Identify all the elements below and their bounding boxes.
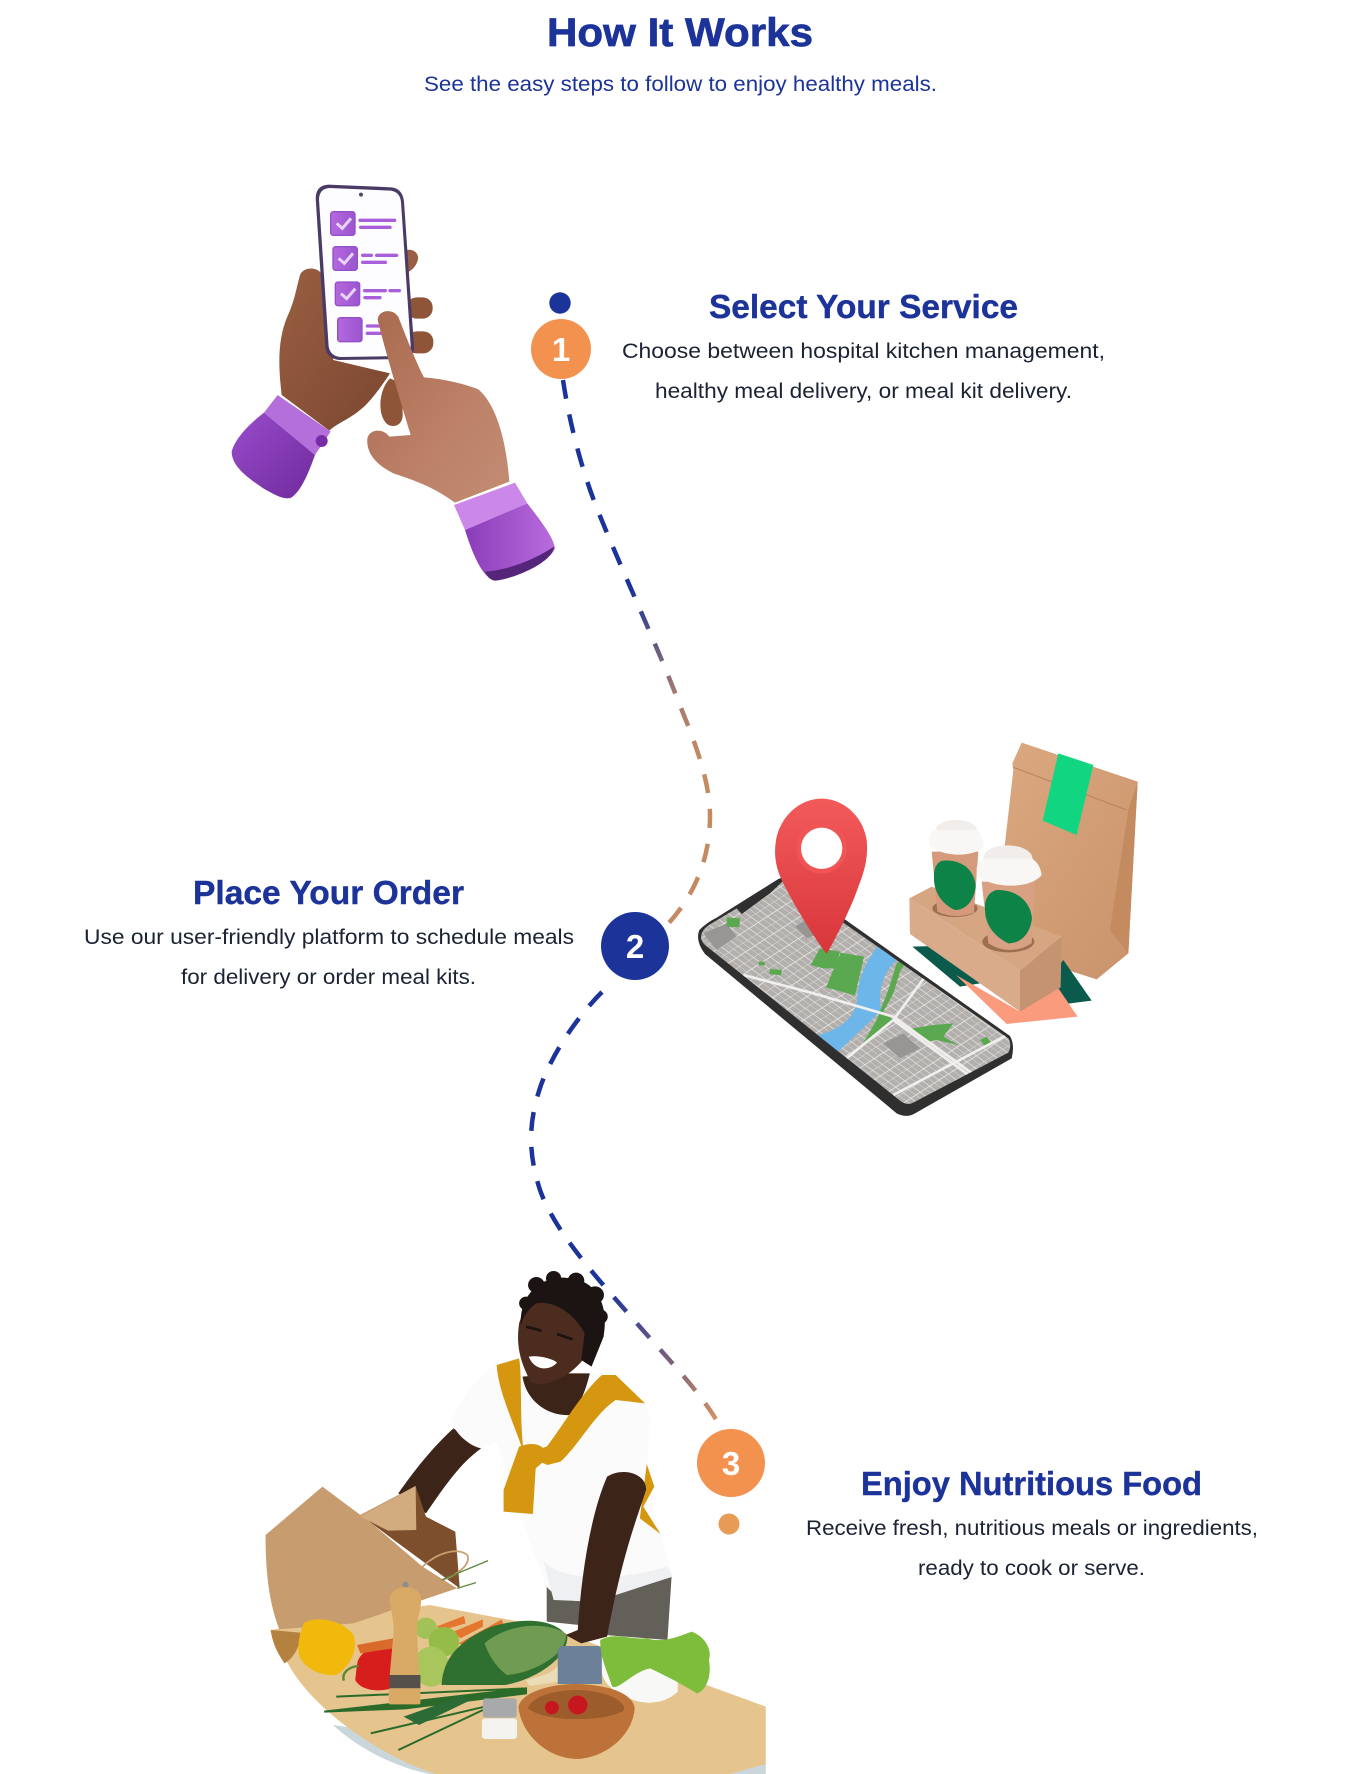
step 2 heading: Place Your Order bbox=[193, 874, 464, 911]
step 2 badge: 2 bbox=[626, 928, 644, 965]
location pin bbox=[775, 799, 867, 954]
step 1 badge: 1 bbox=[552, 331, 570, 368]
step 3 text bbox=[806, 1517, 1258, 1580]
vegetables and fruit bbox=[271, 1616, 567, 1750]
step 1 text: healthy meal delivery, or meal kit delivery. bbox=[655, 380, 1072, 403]
smartphone on table bbox=[558, 1646, 602, 1684]
main roads bbox=[743, 974, 1006, 1096]
man bbox=[398, 1271, 673, 1643]
napkins bbox=[912, 946, 1092, 1024]
step 2 text: Use our user-friendly platform to schedule meals bbox=[84, 926, 574, 949]
phone with map bbox=[693, 873, 1020, 1116]
step 1 text: Choose between hospital kitchen management, bbox=[622, 340, 1105, 363]
end dot bbox=[718, 1514, 740, 1534]
step 1 text bbox=[622, 340, 1105, 403]
step 3 badge: 3 bbox=[722, 1445, 740, 1482]
step 3 text: ready to cook or serve. bbox=[918, 1557, 1145, 1580]
checklist item 4 bbox=[338, 318, 400, 342]
coffee cup 1 bbox=[929, 820, 984, 916]
right hand bbox=[367, 311, 509, 503]
subtitle: See the easy steps to follow to enjoy healthy meals. bbox=[424, 73, 937, 96]
title: How It Works bbox=[547, 11, 813, 55]
left cuff bbox=[232, 395, 331, 498]
icon: hands holding phone checklist bbox=[232, 185, 555, 581]
step 2 badge bbox=[601, 912, 669, 980]
lettuce bowl bbox=[600, 1632, 710, 1703]
start dot bbox=[549, 292, 571, 314]
step 3 badge bbox=[697, 1429, 765, 1497]
phone bbox=[316, 185, 414, 360]
photo: man unpacking groceries bbox=[266, 1271, 766, 1774]
coffee cup tray bbox=[909, 887, 1062, 1012]
checklist item 3 bbox=[335, 282, 399, 306]
spice jar bbox=[482, 1698, 517, 1739]
dashed path: step 2 to step 3 bbox=[531, 992, 722, 1430]
left hand bbox=[279, 250, 433, 431]
step 3 heading: Enjoy Nutritious Food bbox=[861, 1465, 1202, 1502]
pepper mill bbox=[389, 1582, 421, 1704]
wooden bowl with tomatoes bbox=[518, 1684, 635, 1759]
parks bbox=[727, 917, 992, 1048]
kraft paper bag bbox=[980, 743, 1138, 979]
wooden table bbox=[271, 1605, 766, 1774]
step 3 text: Receive fresh, nutritious meals or ingredients, bbox=[806, 1517, 1258, 1540]
dashed path: step 1 to step 2 bbox=[563, 380, 710, 924]
step 1 badge bbox=[531, 319, 591, 379]
map blocks bbox=[704, 921, 920, 1058]
icon: phone map with pin, coffee and bag bbox=[693, 743, 1138, 1116]
step 1 heading: Select Your Service bbox=[709, 288, 1018, 325]
coffee cup 2 bbox=[977, 845, 1042, 950]
paper bag bbox=[266, 1486, 488, 1629]
checklist item 1 bbox=[331, 212, 395, 235]
right cuff bbox=[454, 483, 555, 581]
step 2 text: for delivery or order meal kits. bbox=[181, 966, 476, 989]
step 2 text bbox=[84, 926, 574, 989]
river bbox=[818, 946, 897, 1052]
checklist item 2 bbox=[333, 247, 397, 270]
